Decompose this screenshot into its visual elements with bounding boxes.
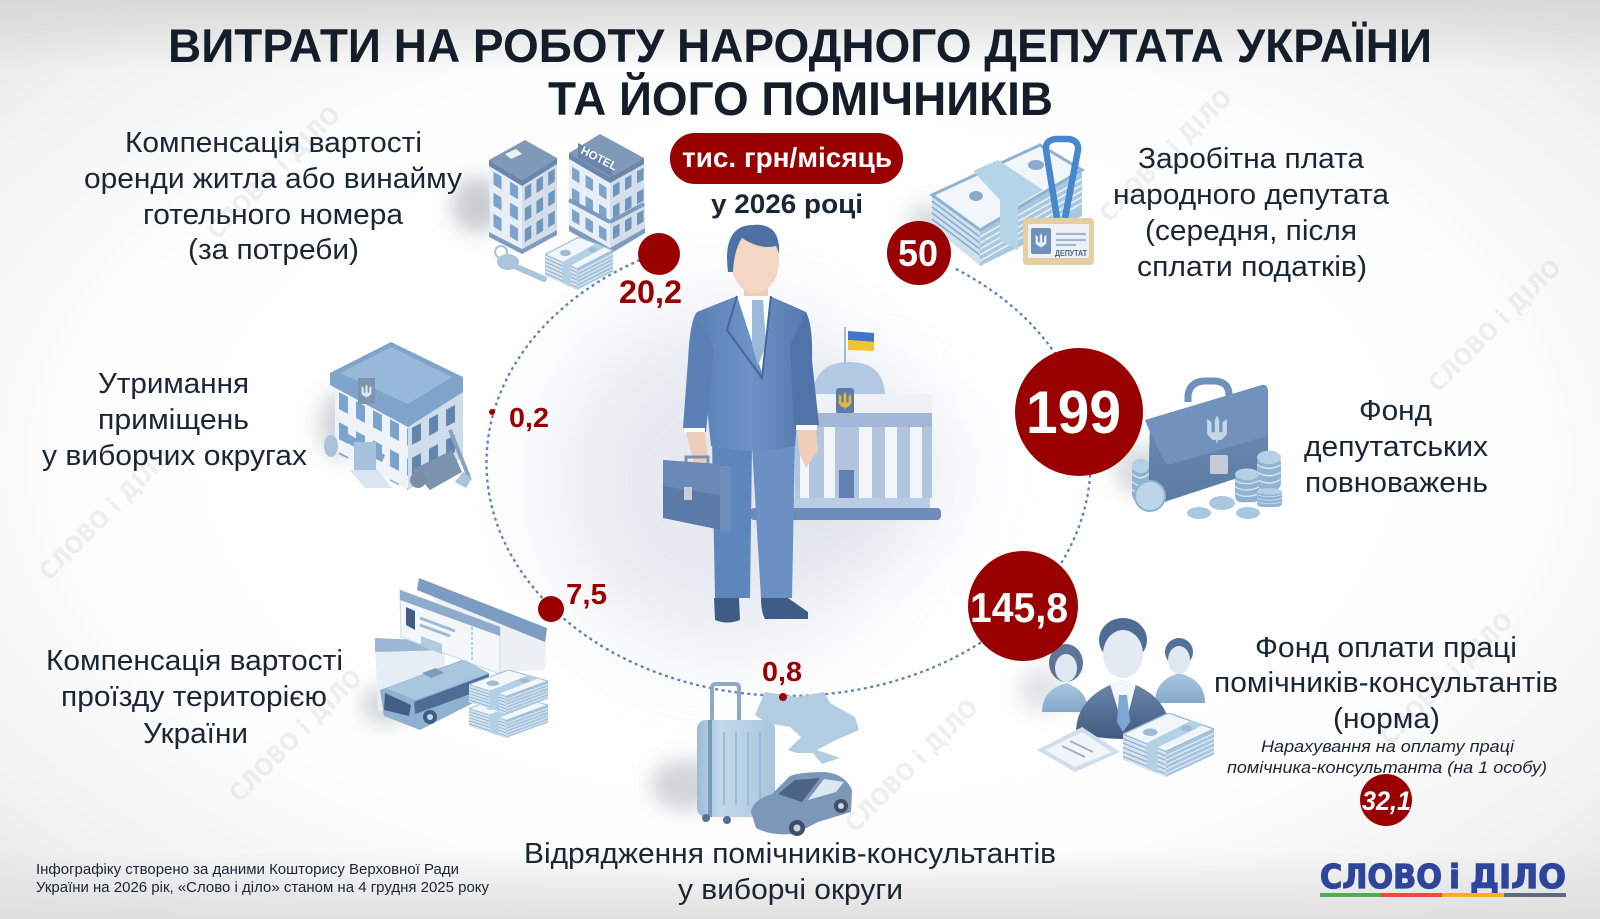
figure: deputy	[683, 225, 819, 622]
value: 0,8	[762, 656, 802, 701]
title: ТА ЙОГО ПОМІЧНИКІВ	[548, 72, 1053, 125]
watermarks: СЛОВО і ДІЛО	[1423, 254, 1567, 398]
icon: hotel buildings: HOTEL	[579, 145, 619, 173]
value: 0,8: 0,8	[762, 656, 802, 687]
watermarks: СЛОВО і ДІЛО	[202, 101, 346, 245]
note: per-assistant accrual: помічника-консультанта (на 1 особу)	[1227, 758, 1547, 777]
label: assistants business trips: Відрядження помічників-консультантів	[524, 838, 1056, 870]
unit pill	[670, 133, 903, 184]
label: deputy salary: Заробітна плата	[1138, 143, 1364, 175]
label: office maintenance: у виборчих округах	[42, 440, 307, 472]
value: 7,5	[538, 579, 607, 622]
value: 0,2	[489, 402, 549, 433]
value: 50	[887, 221, 951, 285]
label: assistants payroll fund: (норма)	[1333, 703, 1440, 735]
source note: України на 2026 рік, «Слово і діло» станом на 4 грудня 2025 року	[36, 880, 490, 896]
value: 7,5: 7,5	[566, 579, 607, 611]
value: 0,2: 0,2	[509, 402, 549, 433]
label: assistants business trips: у виборчі округи	[678, 874, 903, 906]
icon: hotel buildings	[489, 134, 645, 254]
label: travel compensation	[46, 645, 343, 750]
title	[168, 19, 1432, 125]
note: per-assistant accrual: Нарахування на оплату праці	[1261, 737, 1515, 756]
icon: tickets	[375, 578, 547, 712]
label: housing compensation: Компенсація вартості	[125, 127, 422, 159]
icon: bus	[380, 660, 489, 730]
icon: money and deputy badge	[932, 139, 1094, 266]
label: office maintenance	[42, 368, 307, 472]
watermarks	[34, 84, 1567, 838]
watermarks: СЛОВО і ДІЛО	[840, 694, 984, 838]
label: deputy powers fund	[1304, 395, 1488, 499]
icon: money stack near hotel	[545, 237, 613, 290]
icon: assistants group	[1037, 618, 1214, 777]
label: deputy salary: (середня, після	[1145, 215, 1357, 247]
icon: key	[495, 246, 544, 279]
icon: parliament building	[750, 327, 941, 520]
value: 145,8: 145,8	[970, 584, 1068, 631]
dotted ring	[486, 260, 1090, 696]
note: per-assistant accrual	[1227, 737, 1547, 777]
logo	[1320, 857, 1566, 897]
value: 20,2: 20,2	[619, 274, 682, 310]
label: office maintenance: приміщень	[98, 404, 249, 436]
value: 199	[1015, 348, 1143, 476]
label: deputy salary: народного депутата	[1113, 179, 1389, 211]
label: assistants payroll fund	[1214, 632, 1558, 735]
logo: СЛОВО	[1320, 857, 1442, 896]
label: assistants payroll fund: Фонд оплати праці	[1255, 632, 1517, 664]
logo: ДІЛО	[1470, 857, 1566, 896]
label: deputy powers fund: повноважень	[1305, 467, 1488, 499]
value: 32,1	[1360, 774, 1412, 826]
icon: money stacks near bus	[469, 670, 548, 738]
value: 145,8	[968, 551, 1078, 661]
title: ВИТРАТИ НА РОБОТУ НАРОДНОГО ДЕПУТАТА УКРАЇНИ	[168, 19, 1432, 72]
label: deputy salary: сплати податків)	[1137, 251, 1367, 283]
label: housing compensation: (за потреби)	[188, 234, 359, 266]
label: travel compensation: України	[143, 718, 248, 750]
watermarks: СЛОВО і ДІЛО	[1094, 84, 1238, 228]
soft shadows	[318, 177, 1166, 811]
value: 20,2	[619, 233, 682, 310]
year label: у 2026 році	[711, 189, 863, 219]
logo: і	[1449, 857, 1460, 896]
icon: money and deputy badge: ДЕПУТАТ	[1055, 249, 1087, 258]
icon: large briefcase with coins	[1132, 381, 1282, 519]
unit pill: тис. грн/місяць	[682, 142, 892, 173]
label: housing compensation: готельного номера	[143, 199, 403, 231]
watermarks: СЛОВО і ДІЛО	[1375, 607, 1519, 751]
label: deputy powers fund: Фонд	[1359, 395, 1432, 427]
value: 199: 199	[1026, 379, 1121, 446]
label: housing compensation	[84, 127, 463, 266]
icon: district office building	[324, 342, 472, 490]
watermarks: СЛОВО і ДІЛО	[34, 442, 178, 586]
label: assistants payroll fund: помічників-консультантів	[1214, 667, 1558, 699]
label: assistants business trips	[524, 838, 1056, 906]
label: housing compensation: оренди житла або винайму	[84, 163, 463, 195]
icon: map of Ukraine	[755, 692, 859, 764]
source note	[36, 862, 490, 896]
watermarks: СЛОВО і ДІЛО	[224, 664, 368, 808]
source note: Інфографіку створено за даними Кошторису Верховної Ради	[36, 862, 459, 878]
label: deputy powers fund: депутатських	[1304, 431, 1488, 463]
icon: suitcase	[697, 684, 775, 824]
label: travel compensation: Компенсація вартості	[46, 645, 343, 677]
value: 50: 50	[898, 233, 938, 274]
icon: car	[751, 772, 852, 836]
icon: hand briefcase	[663, 457, 731, 532]
value: 32,1: 32,1	[1362, 786, 1411, 816]
label: travel compensation: проїзду територією	[61, 681, 327, 713]
label: deputy salary	[1113, 143, 1389, 283]
label: office maintenance: Утримання	[98, 368, 249, 400]
